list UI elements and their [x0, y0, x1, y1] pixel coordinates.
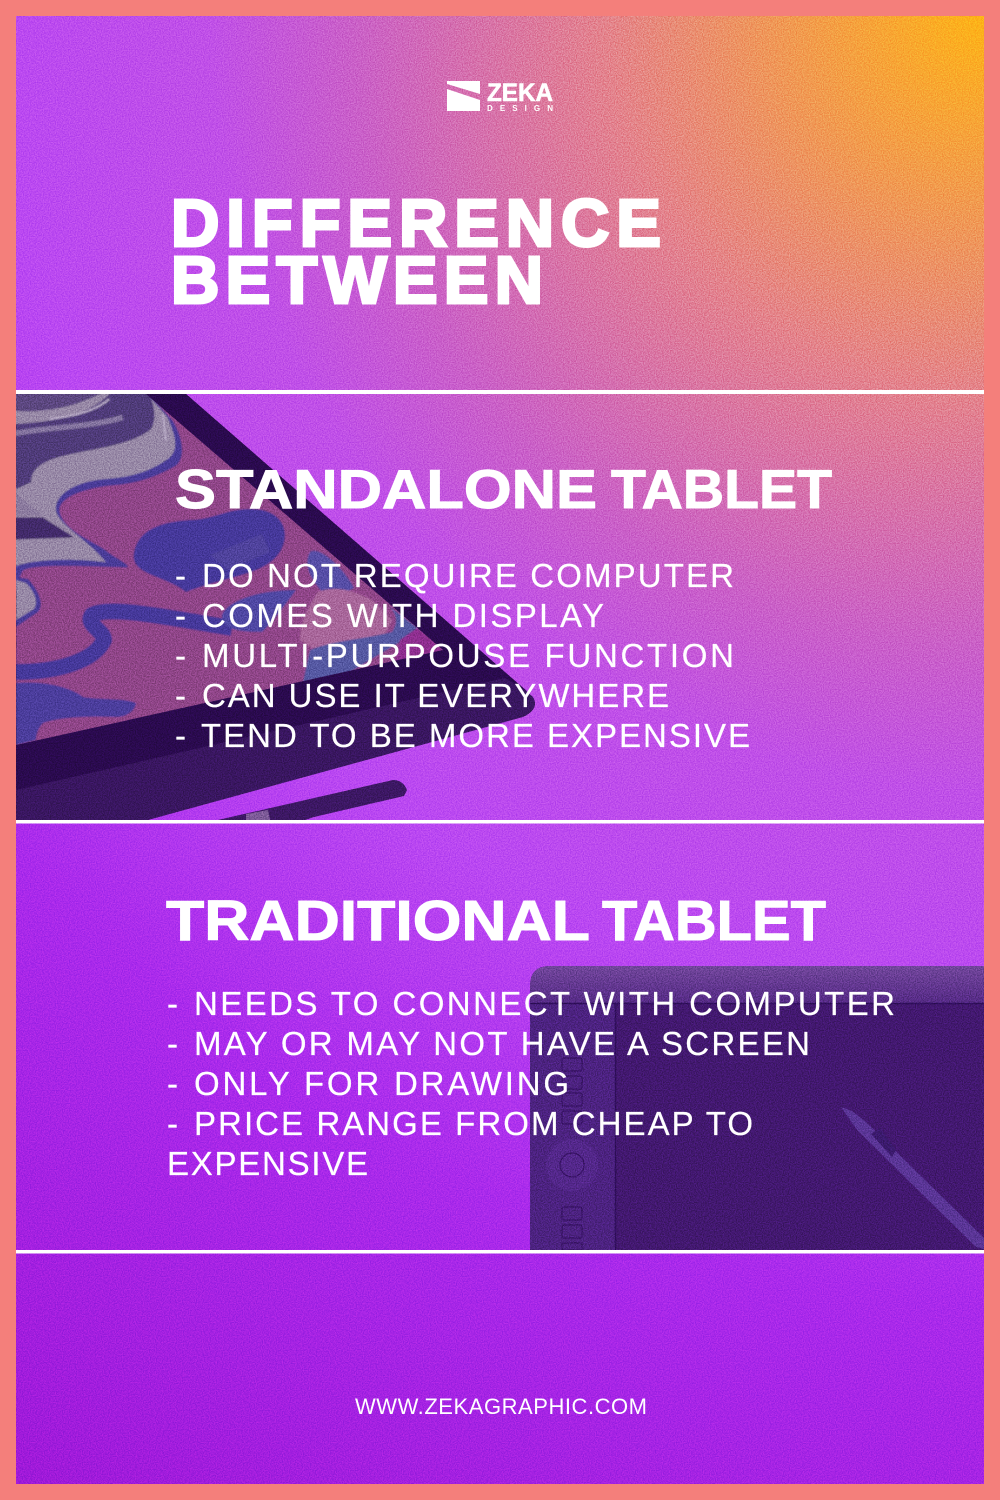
item: PRICE RANGE FROM CHEAP TO — [194, 1105, 753, 1142]
title line 1: DIFFERENCE — [171, 186, 661, 261]
item: - — [167, 985, 178, 1022]
panel: standalone tablet — [175, 458, 832, 754]
title line 2: BETWEEN — [171, 243, 543, 318]
item: - — [167, 1065, 178, 1102]
item: - — [175, 677, 186, 714]
heading — [166, 889, 826, 953]
item: - — [175, 597, 186, 634]
item: MULTI-PURPOUSE FUNCTION — [202, 637, 734, 674]
logo tagline: DESIGN — [487, 104, 553, 113]
item continuation: EXPENSIVE — [167, 1145, 368, 1182]
item: DO NOT REQUIRE COMPUTER — [202, 557, 734, 594]
tablet pen — [841, 1107, 984, 1249]
express keys and wheel — [546, 1058, 598, 1250]
stylus — [218, 780, 407, 820]
heading: TRADITIONAL — [166, 889, 590, 953]
tablet screen — [13, 391, 456, 754]
feature list — [167, 985, 895, 1182]
logo mark — [447, 81, 480, 111]
item: TEND TO BE MORE EXPENSIVE — [201, 717, 750, 754]
tablet body — [16, 394, 535, 820]
item: ONLY FOR DRAWING — [194, 1065, 569, 1102]
divider 1 — [16, 390, 984, 394]
illustration: standalone tablet — [13, 391, 535, 820]
divider 3 — [16, 1250, 984, 1254]
tablet body — [530, 966, 984, 1250]
illustration: traditional tablet — [530, 966, 984, 1250]
panel: traditional tablet — [166, 889, 895, 1182]
item: MAY OR MAY NOT HAVE A SCREEN — [194, 1025, 810, 1062]
item: - — [167, 1025, 178, 1062]
item: - — [175, 637, 186, 674]
tablet bezel — [16, 394, 528, 790]
item: - — [175, 717, 186, 754]
heading: STANDALONE — [175, 458, 597, 520]
item: COMES WITH DISPLAY — [202, 597, 604, 634]
title — [171, 186, 661, 318]
logo wordmark: ZEKA — [487, 79, 553, 107]
item: - — [167, 1105, 178, 1142]
heading — [175, 458, 832, 520]
divider 2 — [16, 820, 984, 824]
item: CAN USE IT EVERYWHERE — [202, 677, 669, 714]
tablet top lid — [530, 966, 984, 1003]
item: - — [175, 557, 186, 594]
logo — [447, 79, 553, 113]
heading: TABLET — [602, 889, 826, 953]
stylus ring — [246, 810, 270, 820]
feature list — [175, 557, 750, 754]
item: NEEDS TO CONNECT WITH COMPUTER — [194, 985, 895, 1022]
heading: TABLET — [611, 458, 832, 520]
control strip — [530, 1003, 615, 1250]
footer url: WWW.ZEKAGRAPHIC.COM — [355, 1394, 647, 1419]
